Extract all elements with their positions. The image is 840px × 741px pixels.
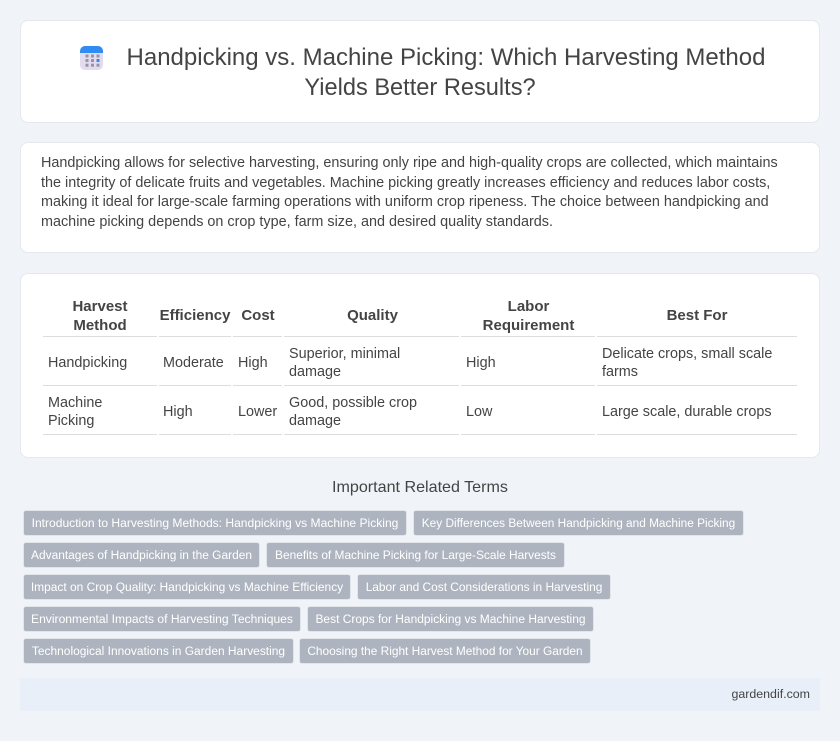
table header: Labor: [508, 298, 549, 315]
table row: machine picking: Large scale, durable crops: [602, 404, 772, 420]
footer source text: gardendif.com: [731, 687, 810, 701]
title: [127, 44, 765, 101]
table row: handpicking: Handpicking: [48, 355, 127, 371]
table header: Quality: [347, 307, 398, 324]
table row: machine picking: Good, possible crop: [289, 395, 417, 411]
table row: handpicking: Superior, minimal: [289, 346, 400, 362]
related terms tags: Introduction to Harvesting Methods: Handpicking vs Machine Picking: [32, 516, 398, 530]
table header: Efficiency: [160, 307, 230, 324]
table row: machine picking: Picking: [48, 413, 94, 429]
intro text: making it ideal for large-scale farming operations with uniform crop ripeness. The choice between handpicking and: [41, 194, 769, 210]
table row: handpicking: High: [466, 355, 496, 371]
table row: machine picking: damage: [289, 413, 341, 429]
table header: Requirement: [483, 317, 574, 334]
panel: title header: [20, 20, 820, 123]
table row: handpicking: [48, 346, 772, 380]
heading: related terms: Important Related Terms: [332, 478, 508, 496]
intro text: machine picking depends on crop type, farm size, and desired quality standards.: [41, 214, 553, 230]
intro text: the integrity of delicate fruits and vegetables. Machine picking greatly increases efficiency and reduces labor costs,: [41, 174, 770, 190]
table row: machine picking: Lower: [238, 404, 277, 420]
related terms tags: Key Differences Between Handpicking and Machine Picking: [422, 516, 735, 530]
panel: introduction: [20, 142, 820, 253]
table row: handpicking: farms: [602, 364, 638, 380]
related terms tags: Impact on Crop Quality: Handpicking vs Machine Efficiency: [31, 580, 343, 594]
table header: [72, 298, 728, 334]
table header: Method: [73, 317, 127, 334]
table row: machine picking: Low: [466, 404, 492, 420]
related terms tags: Best Crops for Handpicking vs Machine Harvesting: [315, 612, 586, 626]
table row: machine picking: Machine: [48, 395, 102, 411]
related terms tags: Technological Innovations in Garden Harvesting: [32, 644, 285, 658]
icon: calendar: [80, 46, 103, 70]
table row: machine picking: High: [163, 404, 193, 420]
related terms tags: Advantages of Handpicking in the Garden: [31, 548, 252, 562]
table row: handpicking: damage: [289, 364, 341, 380]
table header: Harvest: [72, 298, 128, 315]
related terms tags: [23, 510, 744, 664]
intro text: [41, 155, 778, 230]
table row: handpicking: Moderate: [163, 355, 224, 371]
panel: comparison table: [20, 273, 820, 458]
title: Yields Better Results?: [304, 75, 536, 101]
related terms tags: Benefits of Machine Picking for Large-Scale Harvests: [275, 548, 556, 562]
table header: Cost: [241, 307, 275, 324]
table row: machine picking: [48, 395, 772, 429]
related terms tags: Choosing the Right Harvest Method for Your Garden: [307, 644, 583, 658]
table row: handpicking: Delicate crops, small scale: [602, 346, 772, 362]
related terms tags: Environmental Impacts of Harvesting Techniques: [31, 612, 293, 626]
related terms tags: Labor and Cost Considerations in Harvesting: [366, 580, 602, 594]
intro text: Handpicking allows for selective harvesting, ensuring only ripe and high-quality crops are collected, which maintains: [41, 155, 778, 171]
table row: handpicking: High: [238, 355, 268, 371]
footer: [20, 678, 820, 711]
title: Handpicking vs. Machine Picking: Which Harvesting Method: [127, 44, 765, 71]
table header: Best For: [667, 307, 727, 324]
